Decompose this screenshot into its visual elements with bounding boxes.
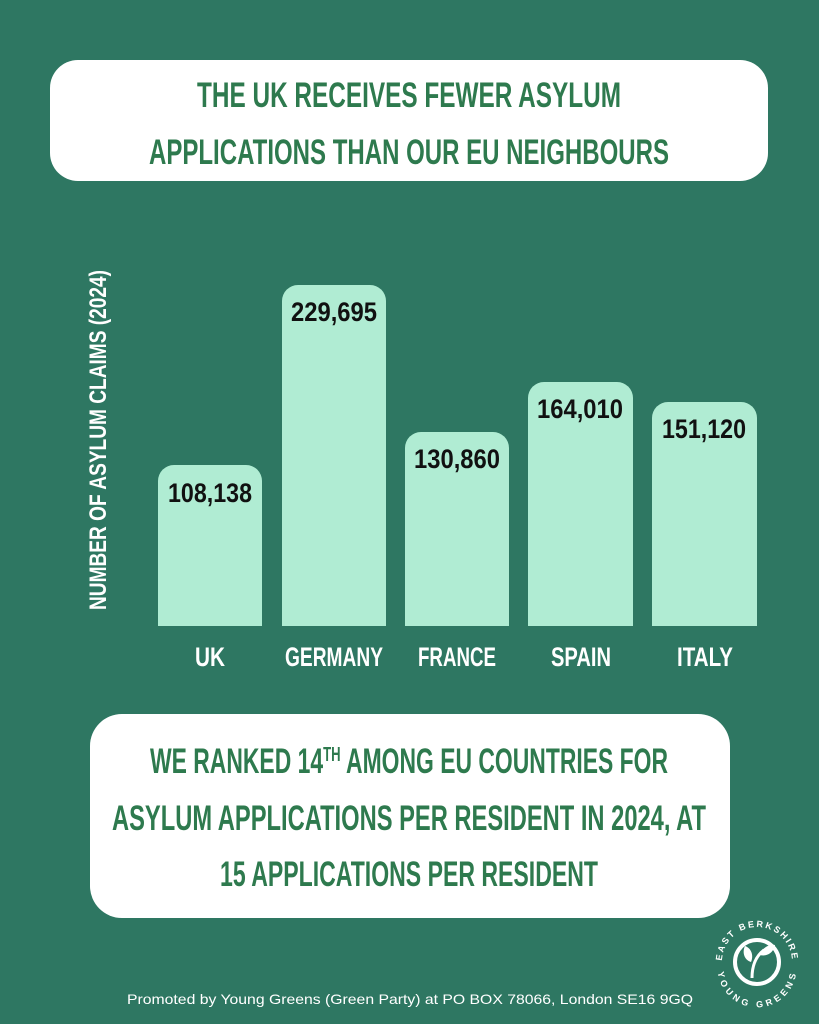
country labels: GERMANY (285, 642, 383, 672)
title text: THE UK RECEIVES FEWER ASYLUM (197, 76, 621, 115)
bottom callout panel (90, 714, 730, 918)
bar: France (405, 432, 509, 626)
bar: Italy: 151,120 (662, 414, 746, 444)
callout text: 15 APPLICATIONS PER RESIDENT (220, 855, 598, 894)
logo: East Berkshire Young Greens: YOUNG GREENS (718, 971, 796, 1008)
bar: UK (158, 465, 262, 626)
callout text: TH (323, 744, 341, 766)
country labels: UK (195, 642, 225, 672)
bar: France: 130,860 (414, 444, 500, 474)
y axis label: NUMBER OF ASYLUM CLAIMS (2024) (85, 270, 112, 610)
logo: East Berkshire Young Greens (716, 920, 798, 1008)
callout text (112, 742, 706, 894)
bar: Italy (652, 402, 757, 626)
title panel (50, 60, 768, 181)
country labels (195, 642, 733, 672)
bar: Germany (282, 285, 386, 626)
country labels: ITALY (677, 642, 733, 672)
title text (149, 76, 669, 172)
bar: Germany: 229,695 (291, 297, 377, 327)
bar chart (158, 285, 757, 626)
bar: Spain: 164,010 (537, 394, 623, 424)
logo: East Berkshire Young Greens: EAST BERKSHIRE (716, 920, 798, 960)
bar: Spain (528, 382, 633, 626)
country labels: FRANCE (418, 642, 496, 672)
callout text: WE RANKED 14 (150, 742, 414, 781)
bar: UK: 108,138 (168, 478, 252, 508)
footer: Promoted by Young Greens (Green Party) at PO BOX 78066, London SE16 9GQ (127, 991, 693, 1007)
country labels: SPAIN (551, 642, 611, 672)
